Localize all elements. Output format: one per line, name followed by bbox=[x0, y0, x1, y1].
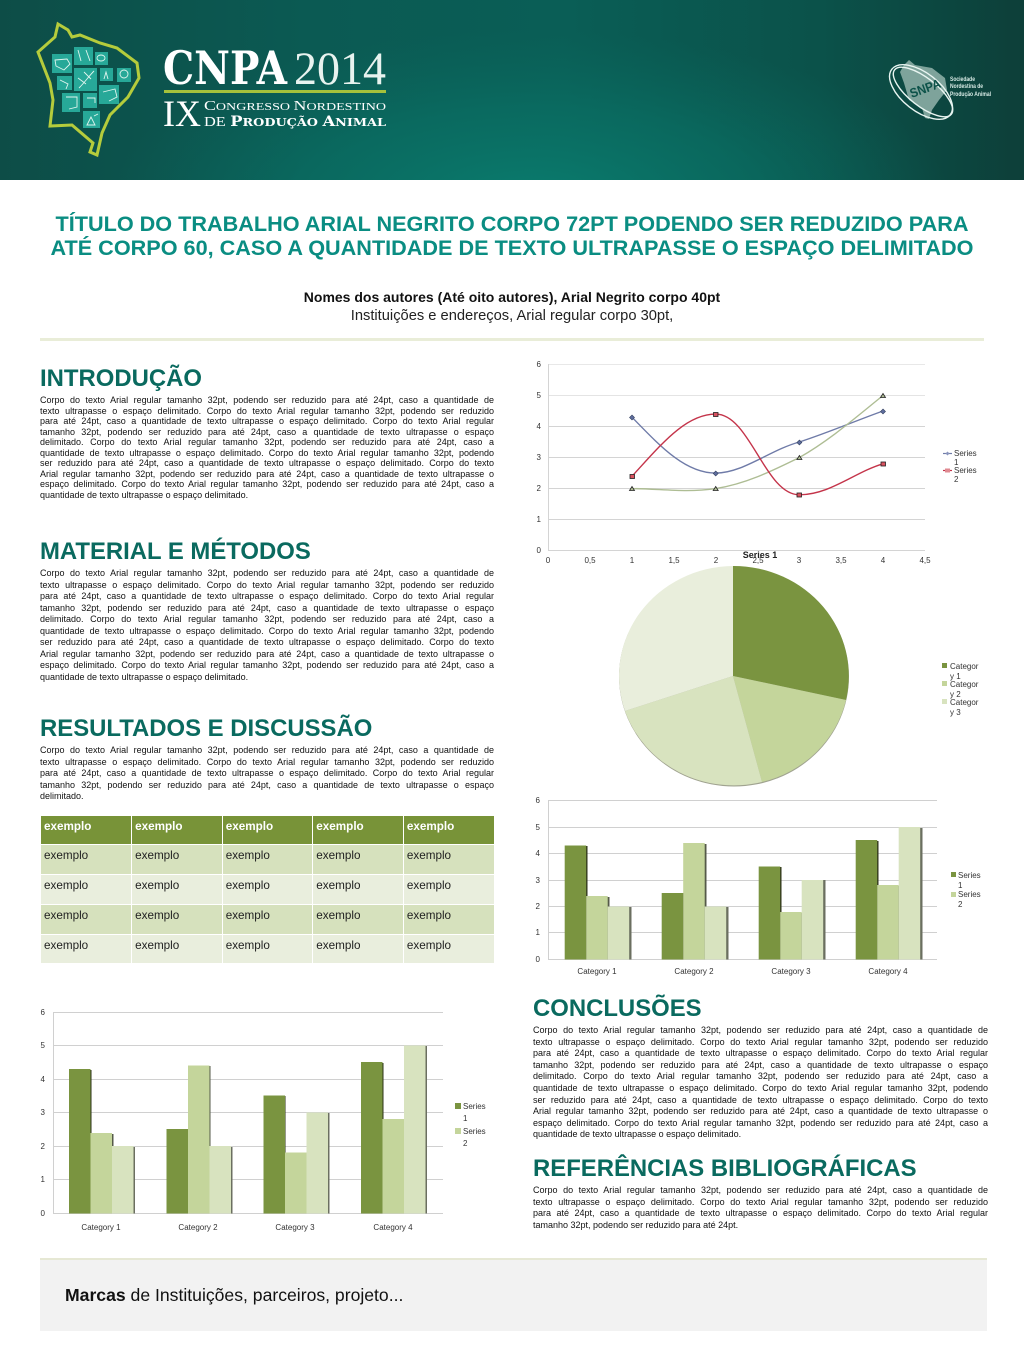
line chart: 2 bbox=[537, 484, 542, 493]
title: TÍTULO DO TRABALHO ARIAL NEGRITO CORPO 72PT PODENDO SER REDUZIDO PARA bbox=[56, 211, 968, 236]
results table: exemplo bbox=[407, 909, 451, 922]
results table: exemplo bbox=[226, 909, 270, 922]
results table: exemplo bbox=[44, 909, 88, 922]
bar chart: left: 2 bbox=[463, 1139, 468, 1148]
bar chart: right: Category 3 bbox=[771, 967, 811, 976]
text: conclusões: quantidade de texto ultrapasse o espaço delimitado. bbox=[533, 1129, 741, 1139]
bar chart: right: 2 bbox=[536, 902, 541, 911]
title bbox=[50, 211, 974, 260]
logo: SNPA: SNPA bbox=[908, 76, 943, 101]
line chart: 2,5 bbox=[752, 556, 764, 565]
bar chart: left: 1 bbox=[41, 1175, 46, 1184]
results table: exemplo bbox=[44, 879, 88, 892]
pie chart: Categor bbox=[950, 680, 979, 689]
line chart: 4 bbox=[881, 556, 886, 565]
results table bbox=[41, 816, 494, 963]
logo: CNPA 2014 wordmark: 2014 bbox=[294, 43, 386, 95]
bar chart: left: Category 4 bbox=[373, 1223, 413, 1232]
text: conclusões bbox=[533, 1025, 988, 1139]
text: material e métodos: quantidade de texto ultrapasse o espaço delimitado. bbox=[40, 672, 248, 682]
bar chart: left: 1 bbox=[463, 1114, 468, 1123]
logo: CNPA northeast map bbox=[38, 24, 139, 155]
text: referências bibliográficas: Corpo do texto Arial regular tamanho 32pt, podendo ser reduzido para até 24pt, caso a quantidade de bbox=[533, 1185, 988, 1195]
results table: exemplo bbox=[226, 939, 270, 952]
logo: SNPA: Sociedade bbox=[950, 77, 976, 83]
line chart: 6 bbox=[537, 360, 542, 369]
results table: exemplo bbox=[44, 939, 88, 952]
results table: exemplo bbox=[226, 879, 270, 892]
header banner bbox=[0, 0, 1024, 180]
bar chart: left: Category 2 bbox=[178, 1223, 218, 1232]
bar chart: left: 6 bbox=[41, 1008, 46, 1017]
results table: exemplo bbox=[226, 849, 270, 862]
bar chart: right: 2 bbox=[958, 900, 963, 909]
line chart: 1 bbox=[537, 515, 542, 524]
line chart: 1,5 bbox=[668, 556, 680, 565]
text: introdução: espaço delimitado. Corpo do texto Arial regular tamanho 32pt, podendo ser reduzido para até 24pt, caso a bbox=[40, 479, 494, 489]
heading: introdução: INTRODUÇÃO bbox=[40, 365, 202, 392]
text: resultados e discussão: texto ultrapasse o espaço delimitado. Corpo do texto Arial regular tamanho 32pt, podendo ser reduzido bbox=[40, 756, 494, 766]
text: material e métodos: quantidade de texto ultrapasse o espaço delimitado. Corpo do texto Arial regular tamanho 32pt, podendo bbox=[40, 626, 494, 636]
text: introdução: delimitado. Corpo do texto Arial regular tamanho 32pt, podendo ser reduzido para até 24pt, caso a bbox=[40, 437, 494, 447]
text: introdução: tamanho 32pt, podendo ser reduzido para até 24pt, caso a quantidade de texto ultrapasse o espaço bbox=[40, 426, 494, 436]
bar chart: right: Series bbox=[958, 890, 981, 899]
text: material e métodos bbox=[40, 568, 494, 682]
results table: exemplo bbox=[135, 820, 183, 833]
bar chart: left: 2 bbox=[41, 1142, 46, 1151]
results table: exemplo bbox=[316, 939, 360, 952]
line chart: 0 bbox=[546, 556, 551, 565]
results table: exemplo bbox=[407, 939, 451, 952]
results table: exemplo bbox=[44, 849, 88, 862]
line chart: 4,5 bbox=[919, 556, 931, 565]
line chart: 3,5 bbox=[835, 556, 847, 565]
text: conclusões: tamanho 32pt, podendo ser reduzido para até 24pt, caso a quantidade de texto ultrapasse o espaço bbox=[533, 1060, 988, 1070]
bar chart: left: 4 bbox=[41, 1075, 46, 1084]
heading: referências bibliográficas: REFERÊNCIAS BIBLIOGRÁFICAS bbox=[533, 1155, 917, 1182]
text: material e métodos: texto ultrapasse o espaço delimitado. Corpo do texto Arial regular tamanho 32pt, podendo ser reduzido bbox=[40, 580, 494, 590]
heading: conclusões: CONCLUSÕES bbox=[533, 995, 702, 1022]
line chart: 2 bbox=[714, 556, 719, 565]
text: introdução: Corpo do texto Arial regular tamanho 32pt, podendo ser reduzido para até 24pt, caso a quantidade de bbox=[40, 395, 494, 405]
bar chart: right: 5 bbox=[536, 823, 541, 832]
line chart: 0 bbox=[537, 546, 542, 555]
text: referências bibliográficas: para até 24pt, caso a quantidade de texto ultrapasse o espaço delimitado. Corpo do texto Arial regular bbox=[533, 1208, 988, 1218]
line chart: 3 bbox=[537, 453, 542, 462]
text: material e métodos: espaço delimitado. Corpo do texto Arial regular tamanho 32pt, podendo ser reduzido para até 24pt, caso a bbox=[40, 660, 494, 670]
bar chart: left: Category 3 bbox=[275, 1223, 315, 1232]
pie chart: y 1 bbox=[950, 672, 961, 681]
logo: SNPA: Produção Animal bbox=[950, 92, 991, 98]
bar chart: right: 4 bbox=[536, 849, 541, 858]
logo: SNPA bbox=[880, 54, 991, 130]
institutions: Instituições e endereços, Arial regular corpo 30pt, bbox=[351, 308, 673, 324]
bar chart: right: 6 bbox=[536, 796, 541, 805]
text: material e métodos: tamanho 32pt, podendo ser reduzido para até 24pt, caso a quantidade de texto ultrapasse o espaço bbox=[40, 603, 494, 613]
results table: exemplo bbox=[316, 909, 360, 922]
bar chart: left: Series bbox=[463, 1127, 486, 1136]
pie chart: y 3 bbox=[950, 708, 961, 717]
text: resultados e discussão: delimitado. bbox=[40, 791, 84, 801]
footer band bbox=[40, 1258, 987, 1331]
text: introdução: texto ultrapasse o espaço delimitado. Corpo do texto Arial regular tamanho 32pt, podendo ser reduzido bbox=[40, 406, 494, 416]
bar chart: left: Category 1 bbox=[81, 1223, 121, 1232]
authors: Nomes dos autores (Até oito autores), Arial Negrito corpo 40pt bbox=[304, 289, 720, 305]
logo: CNPA 2014 wordmark: IX bbox=[163, 94, 201, 135]
text: resultados e discussão: para até 24pt, caso a quantidade de texto ultrapasse o espaço delimitado. Corpo do texto Arial regular bbox=[40, 768, 494, 778]
pie chart: y 2 bbox=[950, 690, 961, 699]
footer text: Marcas de Instituições, parceiros, projeto... bbox=[65, 1285, 403, 1305]
line chart: 5 bbox=[537, 391, 542, 400]
text: conclusões: delimitado. Corpo do texto Arial regular tamanho 32pt, podendo ser reduzido para até 24pt, caso a bbox=[533, 1071, 988, 1081]
text: conclusões: Arial regular tamanho 32pt, podendo ser reduzido para até 24pt, caso a quantidade de texto ultrapasse o bbox=[533, 1106, 988, 1116]
results table: exemplo bbox=[316, 879, 360, 892]
logo: CNPA 2014 wordmark: CONGRESSO N ORDESTINO bbox=[204, 99, 386, 114]
bar chart: left: 5 bbox=[41, 1041, 46, 1050]
line chart: 3 bbox=[797, 556, 802, 565]
text: material e métodos: para até 24pt, caso a quantidade de texto ultrapasse o espaço delimitado. Corpo do texto Arial regular bbox=[40, 591, 494, 601]
text: material e métodos: delimitado. Corpo do texto Arial regular tamanho 32pt, podendo ser reduzido para até 24pt, caso a bbox=[40, 614, 494, 624]
bar chart: right: Category 2 bbox=[674, 967, 714, 976]
bar chart: right: 1 bbox=[536, 928, 541, 937]
bar chart: right: 1 bbox=[958, 881, 963, 890]
pie chart: Categor bbox=[950, 662, 979, 671]
line chart: 2 bbox=[954, 475, 959, 484]
bar chart: right: Series bbox=[958, 871, 981, 880]
text: introdução bbox=[40, 395, 494, 500]
line chart: 1 bbox=[954, 458, 959, 467]
bar chart: left: 3 bbox=[41, 1108, 46, 1117]
logo: CNPA 2014 wordmark: DE PRODUÇÃO ANIMAL bbox=[204, 114, 386, 130]
bar chart: left: 0 bbox=[41, 1209, 46, 1218]
text: conclusões: quantidade de texto ultrapasse o espaço delimitado. Corpo do texto Arial regular tamanho 32pt, podendo bbox=[533, 1083, 988, 1093]
pie chart: Series 1 bbox=[743, 550, 777, 560]
results table: exemplo bbox=[407, 879, 451, 892]
logo: SNPA: Nordestina de bbox=[950, 84, 984, 90]
pie chart: Categor bbox=[950, 698, 979, 707]
text: introdução: quantidade de texto ultrapasse o espaço delimitado. Corpo do texto Arial regular tamanho 32pt, podendo bbox=[40, 448, 494, 458]
text: conclusões: espaço delimitado. Corpo do texto Arial regular tamanho 32pt, podendo ser reduzido para até 24pt, caso a bbox=[533, 1118, 988, 1128]
text: resultados e discussão bbox=[40, 745, 494, 801]
results table: exemplo bbox=[135, 879, 179, 892]
text: referências bibliográficas: texto ultrapasse o espaço delimitado. Corpo do texto Arial regular tamanho 32pt, podendo ser reduzido bbox=[533, 1197, 988, 1207]
line chart: 4 bbox=[537, 422, 542, 431]
results table: exemplo bbox=[226, 820, 273, 833]
bar chart: right: 3 bbox=[536, 876, 541, 885]
results table: exemplo bbox=[135, 849, 179, 862]
logo: CNPA 2014 wordmark: CNPA bbox=[163, 41, 288, 95]
line chart: 1 bbox=[630, 556, 635, 565]
results table: exemplo bbox=[407, 849, 451, 862]
bar chart: right: Category 1 bbox=[577, 967, 617, 976]
text: resultados e discussão: Corpo do texto Arial regular tamanho 32pt, podendo ser reduzido para até 24pt, caso a quantidade de bbox=[40, 745, 494, 755]
text: conclusões: Corpo do texto Arial regular tamanho 32pt, podendo ser reduzido para até 24pt, caso a quantidade de bbox=[533, 1025, 988, 1035]
bar chart: left: Series bbox=[463, 1102, 486, 1111]
text: introdução: Arial regular tamanho 32pt, podendo ser reduzido para até 24pt, caso a quantidade de texto ultrapasse o bbox=[40, 468, 494, 478]
text: resultados e discussão: tamanho 32pt, podendo ser reduzido para até 24pt, caso a quantidade de texto ultrapasse o espaço bbox=[40, 780, 494, 790]
line chart: Series bbox=[954, 466, 977, 475]
results table: exemplo bbox=[316, 849, 360, 862]
heading: material e métodos: MATERIAL E MÉTODOS bbox=[40, 538, 311, 565]
text: conclusões: texto ultrapasse o espaço delimitado. Corpo do texto Arial regular tamanho 32pt, podendo ser reduzido bbox=[533, 1037, 988, 1047]
line chart: 0,5 bbox=[584, 556, 596, 565]
results table: exemplo bbox=[135, 939, 179, 952]
text: referências bibliográficas: tamanho 32pt, podendo ser reduzido para até 24pt. bbox=[533, 1220, 738, 1230]
text: material e métodos: Corpo do texto Arial regular tamanho 32pt, podendo ser reduzido para até 24pt, caso a quantidade de bbox=[40, 568, 494, 578]
logo: CNPA 2014 wordmark bbox=[163, 41, 386, 135]
results table: exemplo bbox=[135, 909, 179, 922]
bar chart: right: Category 4 bbox=[868, 967, 908, 976]
text: material e métodos: ser reduzido para até 24pt, caso a quantidade de texto ultrapasse o espaço delimitado. Corpo do texto bbox=[40, 637, 494, 647]
text: conclusões: ser reduzido para até 24pt, caso a quantidade de texto ultrapasse o espaço delimitado. Corpo do texto bbox=[533, 1095, 988, 1105]
title: ATÉ CORPO 60, CASO A QUANTIDADE DE TEXTO ULTRAPASSE O ESPAÇO DELIMITADO bbox=[50, 235, 974, 260]
results table: exemplo bbox=[407, 820, 454, 833]
text: conclusões: para até 24pt, caso a quantidade de texto ultrapasse o espaço delimitado. Corpo do texto Arial regular bbox=[533, 1048, 988, 1058]
text: introdução: para até 24pt, caso a quantidade de texto ultrapasse o espaço delimitado. Corpo do texto Arial regular bbox=[40, 416, 494, 426]
line chart: Series bbox=[954, 449, 977, 458]
results table: exemplo bbox=[316, 820, 364, 833]
text: referências bibliográficas bbox=[533, 1185, 988, 1230]
bar chart: right: 0 bbox=[536, 955, 541, 964]
text: introdução: quantidade de texto ultrapasse o espaço delimitado. bbox=[40, 490, 248, 500]
text: material e métodos: Arial regular tamanho 32pt, podendo ser reduzido para até 24pt, caso a quantidade de texto ultrapasse o bbox=[40, 649, 494, 659]
results table: exemplo bbox=[44, 820, 91, 833]
heading: resultados e discussão: RESULTADOS E DISCUSSÃO bbox=[40, 715, 372, 742]
text: introdução: ser reduzido para até 24pt, caso a quantidade de texto ultrapasse o espaço delimitado. Corpo do texto bbox=[40, 458, 494, 468]
